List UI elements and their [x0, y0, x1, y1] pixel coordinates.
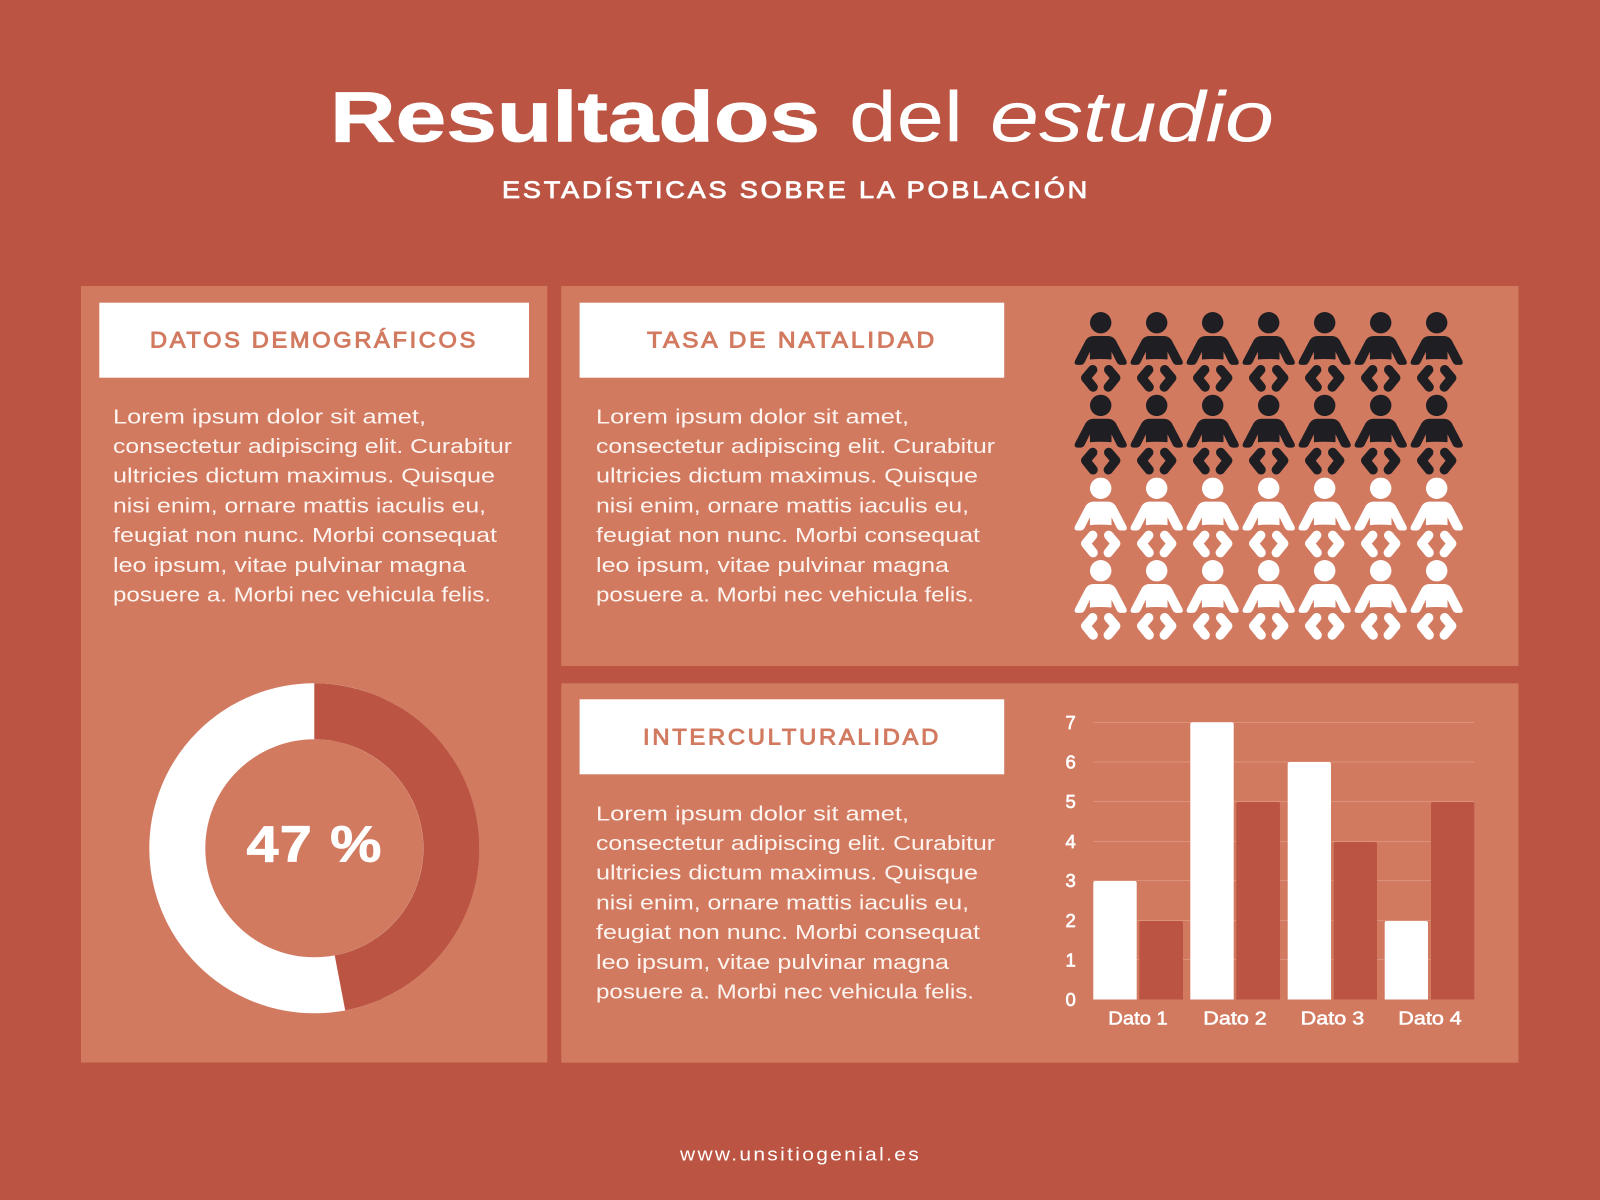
panel: interculturalidad — [561, 683, 1518, 1063]
text block: birth rate — [596, 405, 995, 606]
text block: interculturality: nisi enim, ornare mattis iaculis eu, — [596, 891, 969, 914]
text block: demographics: leo ipsum, vitae pulvinar magna — [113, 554, 467, 577]
text block: birth rate: nisi enim, ornare mattis iaculis eu, — [596, 494, 969, 517]
text block: birth rate: Lorem ipsum dolor sit amet, — [596, 405, 909, 428]
icon row: dark babies — [1075, 312, 1463, 470]
icon row: white babies — [1075, 478, 1463, 635]
text block: interculturality: leo ipsum, vitae pulvinar magna — [596, 951, 950, 974]
heading: interculturalidad: INTERCULTURALIDAD — [643, 724, 941, 749]
text block: birth rate: feugiat non nunc. Morbi consequat — [596, 524, 980, 547]
y axis labels: 1 — [1066, 950, 1076, 970]
y axis labels: 3 — [1066, 870, 1076, 891]
text block: interculturality: feugiat non nunc. Morbi consequat — [596, 921, 980, 944]
y axis labels: 2 — [1066, 910, 1076, 931]
text block: demographics: posuere a. Morbi nec vehicula felis. — [113, 584, 491, 606]
donut chart: 47 %: 47 % — [246, 816, 382, 873]
y axis labels: 5 — [1066, 791, 1076, 812]
title — [330, 78, 1274, 158]
x axis labels — [1108, 1007, 1462, 1028]
bars — [1093, 722, 1474, 1000]
x axis labels: Dato 4 — [1398, 1007, 1462, 1028]
x axis labels: Dato 2 — [1203, 1007, 1267, 1028]
text block: interculturality: posuere a. Morbi nec vehicula felis. — [596, 980, 974, 1004]
text block: interculturality: ultricies dictum maximus. Quisque — [596, 862, 978, 885]
footer url: www.unsitiogenial.es — [679, 1145, 921, 1165]
heading: interculturalidad — [580, 699, 1004, 774]
text block: birth rate: posuere a. Morbi nec vehicula felis. — [596, 584, 974, 606]
y axis labels — [1066, 712, 1076, 1010]
heading: tasa de natalidad — [580, 303, 1004, 378]
text block: birth rate: ultricies dictum maximus. Quisque — [596, 465, 978, 488]
y axis labels: 7 — [1066, 712, 1076, 733]
text block: interculturality: consectetur adipiscing elit. Curabitur — [596, 832, 995, 855]
text block: interculturality: Lorem ipsum dolor sit amet, — [596, 802, 909, 825]
text block: interculturality — [596, 802, 995, 1004]
y axis labels: 0 — [1066, 989, 1076, 1010]
icon grid: babies — [1075, 312, 1463, 635]
text block: demographics — [113, 405, 512, 606]
text block: demographics: Lorem ipsum dolor sit amet, — [113, 405, 426, 428]
y axis labels: 4 — [1066, 831, 1076, 852]
donut chart: 47 % — [177, 683, 479, 1010]
heading: datos demográficos — [99, 303, 529, 378]
text block: demographics: nisi enim, ornare mattis iaculis eu, — [113, 494, 486, 517]
subtitle: ESTADÍSTICAS SOBRE LA POBLACIÓN — [502, 177, 1090, 204]
title: Resultados — [330, 78, 820, 158]
x axis labels: Dato 3 — [1301, 1007, 1364, 1028]
text block: birth rate: leo ipsum, vitae pulvinar magna — [596, 554, 950, 577]
title: del — [849, 78, 963, 158]
x axis labels: Dato 1 — [1108, 1007, 1168, 1028]
title: estudio — [990, 78, 1274, 158]
y axis labels: 6 — [1066, 752, 1076, 772]
panel: tasa de natalidad — [561, 286, 1518, 666]
text block: demographics: feugiat non nunc. Morbi consequat — [113, 524, 497, 547]
bar chart — [1066, 712, 1474, 1028]
text block: birth rate: consectetur adipiscing elit. Curabitur — [596, 435, 995, 458]
heading: tasa de natalidad: TASA DE NATALIDAD — [647, 327, 937, 352]
heading: datos demográficos: DATOS DEMOGRÁFICOS — [150, 327, 478, 352]
text block: demographics: ultricies dictum maximus. Quisque — [113, 465, 495, 488]
panel: datos demográficos — [81, 286, 547, 1062]
text block: demographics: consectetur adipiscing elit. Curabitur — [113, 435, 512, 458]
